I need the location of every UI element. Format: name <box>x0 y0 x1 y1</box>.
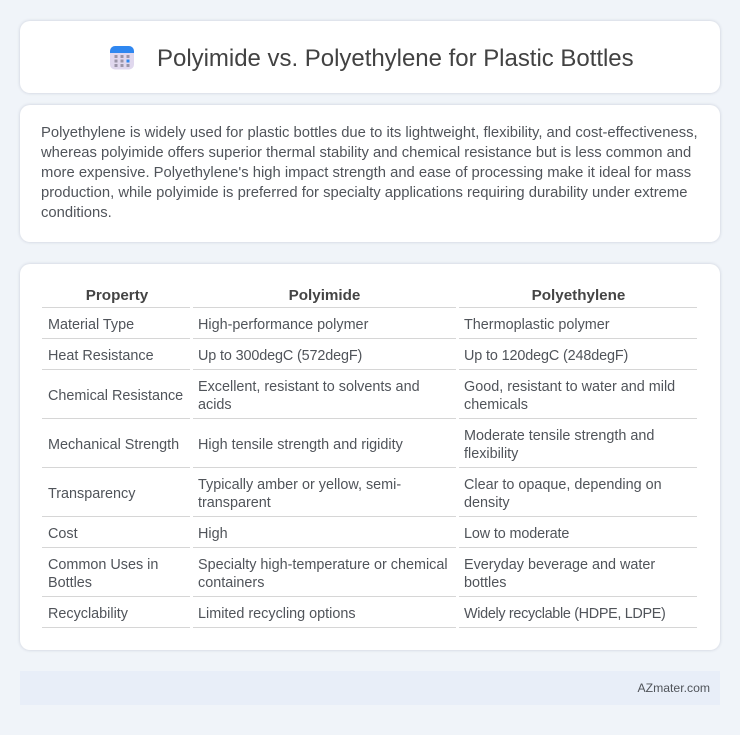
row: Recyclability <box>48 606 666 622</box>
row: Chemical Resistance: Excellent, resistant to solvents and <box>198 379 420 395</box>
text block: summary: whereas polyimide offers superior thermal stability and chemical resistance but is less common and <box>41 145 691 161</box>
row: Chemical Resistance: acids <box>198 397 232 413</box>
row: Common Uses in Bottles: Specialty high-temperature or chemical <box>198 557 448 573</box>
row: Common Uses in Bottles: bottles <box>464 575 506 591</box>
row: Mechanical Strength: High tensile strength and rigidity <box>198 437 403 453</box>
row: Recyclability: Limited recycling options <box>198 606 356 622</box>
row: Transparency: Clear to opaque, depending on <box>464 477 662 493</box>
table header: Polyethylene <box>532 287 625 304</box>
row: Cost <box>48 526 569 542</box>
row: Mechanical Strength: Moderate tensile strength and <box>464 428 654 444</box>
title: Polyimide vs. Polyethylene for Plastic Bottles <box>157 45 634 72</box>
row: Common Uses in Bottles: Everyday beverage and water <box>464 557 655 573</box>
text block: summary: Polyethylene is widely used for plastic bottles due to its lightweight, flexibility, and cost-effectiveness, <box>41 125 698 141</box>
row: Chemical Resistance <box>48 379 675 413</box>
row: Common Uses in Bottles: Common Uses in <box>48 557 158 573</box>
footer bar <box>20 671 720 705</box>
row: Chemical Resistance: Chemical Resistance <box>48 388 183 404</box>
icon: calendar grid <box>110 46 134 70</box>
row: Heat Resistance: Up to 120degC (248degF) <box>464 348 628 364</box>
row: Cost: Low to moderate <box>464 526 569 542</box>
row: Transparency: Transparency <box>48 486 135 502</box>
row: Material Type: High-performance polymer <box>198 317 368 333</box>
row: Transparency: Typically amber or yellow, semi- <box>198 477 401 493</box>
row: Heat Resistance: Up to 300degC (572degF) <box>198 348 362 364</box>
row: Mechanical Strength: Mechanical Strength <box>48 437 179 453</box>
row: Transparency: density <box>464 495 510 511</box>
table header <box>86 287 625 304</box>
row: Transparency: transparent <box>198 495 271 511</box>
text block: summary: production, while polyimide is preferred for specialty applications requiring durability under extreme <box>41 185 687 201</box>
row: Recyclability: Widely recyclable (HDPE, LDPE) <box>464 606 666 622</box>
panel: comparison table <box>20 264 720 650</box>
row: Heat Resistance <box>48 348 628 364</box>
panel: title card <box>20 21 720 93</box>
row: Mechanical Strength: flexibility <box>464 446 518 462</box>
row dividers <box>42 307 697 628</box>
row: Common Uses in Bottles: containers <box>198 575 264 591</box>
row: Common Uses in Bottles <box>48 557 655 591</box>
text block: summary: conditions. <box>41 205 112 221</box>
text block: summary <box>41 125 698 221</box>
row: Mechanical Strength <box>48 428 654 462</box>
row: Material Type: Material Type <box>48 317 134 333</box>
footer text: AZmater.com <box>638 681 710 695</box>
row: Material Type: Thermoplastic polymer <box>464 317 610 333</box>
row: Chemical Resistance: Good, resistant to water and mild <box>464 379 675 395</box>
row: Heat Resistance: Heat Resistance <box>48 348 154 364</box>
row: Transparency <box>48 477 662 511</box>
table header: Property <box>86 287 148 304</box>
table header: Polyimide <box>289 287 360 304</box>
row: Chemical Resistance: chemicals <box>464 397 528 413</box>
text block: summary: more expensive. Polyethylene's high impact strength and ease of processing make it ideal for mass <box>41 165 691 181</box>
panel: summary paragraph <box>20 105 720 242</box>
row: Material Type <box>48 317 610 333</box>
row: Cost: Cost <box>48 526 78 542</box>
row: Recyclability: Recyclability <box>48 606 128 622</box>
row: Cost: High <box>198 526 228 542</box>
row: Common Uses in Bottles: Bottles <box>48 575 92 591</box>
